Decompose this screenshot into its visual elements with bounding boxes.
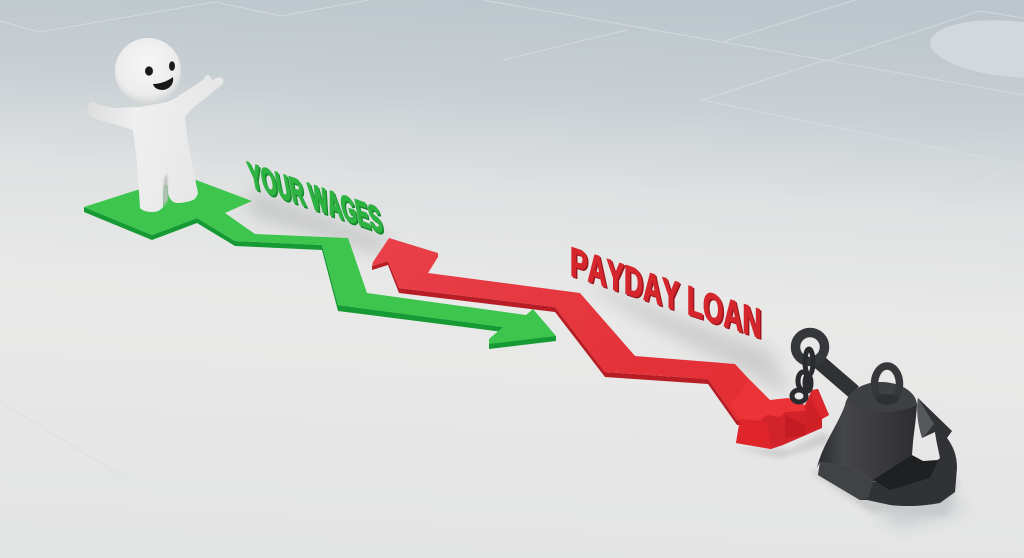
- anchor hook tip highlight: [917, 398, 934, 438]
- anchor ring: [796, 332, 824, 362]
- anchor top eye: [874, 366, 900, 402]
- red arrow: payday loan: [372, 238, 773, 425]
- anchor bell top band: [846, 382, 917, 412]
- figure eyes: [145, 61, 175, 76]
- green arrow: your wages: [84, 180, 556, 349]
- anchor with chain: [792, 332, 957, 506]
- shadows under the arrows: [250, 190, 965, 526]
- broken red arrow end: [730, 380, 829, 449]
- anchor bell: [817, 382, 923, 482]
- figure head: [115, 38, 181, 104]
- label: payday loan: PAYDAY LOAN: [570, 239, 761, 348]
- anchor shank: [817, 360, 854, 392]
- label: your wages: YOUR WAGES: [245, 155, 386, 242]
- figure: smiling white character: [87, 38, 223, 212]
- figure body: [87, 75, 223, 212]
- chain links: [792, 349, 813, 402]
- figure mouth: [153, 77, 173, 90]
- anchor inner shadow: [873, 455, 938, 490]
- figure leg shadow: [163, 173, 168, 207]
- anchor fluke facets: [818, 462, 873, 500]
- anchor hook and fluke: [818, 398, 957, 506]
